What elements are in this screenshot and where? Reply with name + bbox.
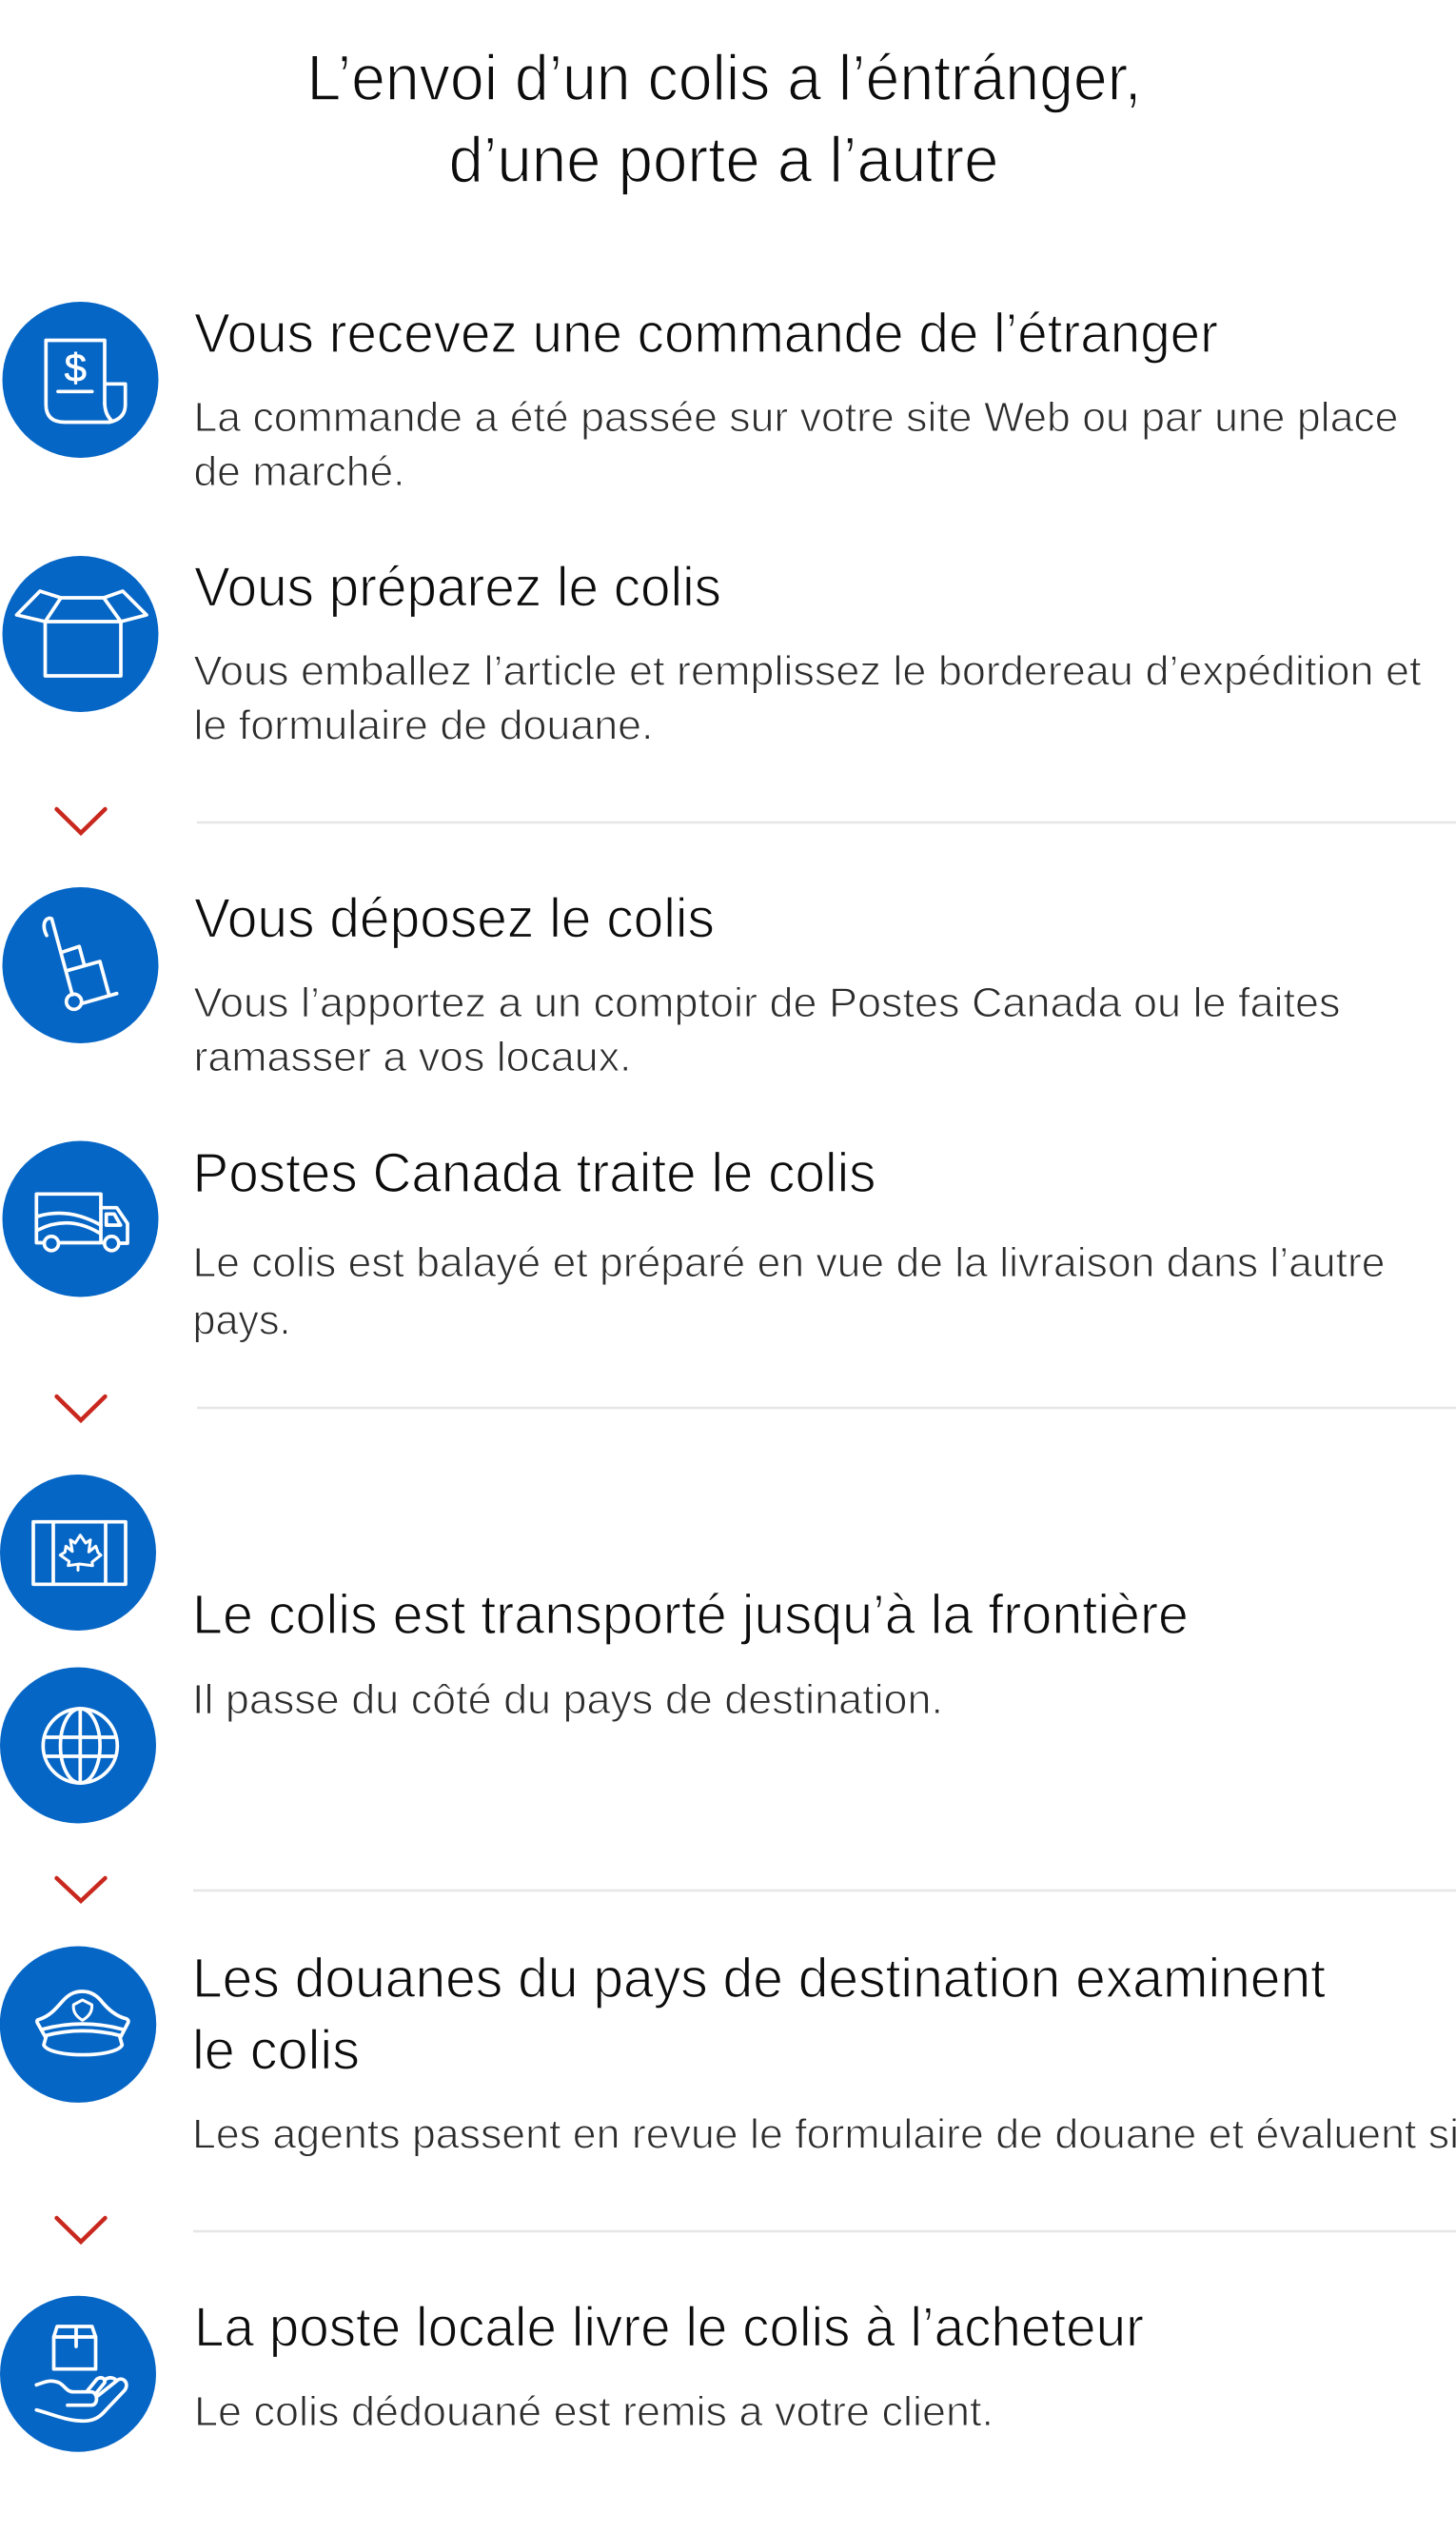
heading: préparation: Vous préparez le colis [194,556,721,619]
heading: commande: Vous recevez une commande de l’étranger [194,303,1218,365]
text: traitement: pays. [192,1297,291,1344]
text: commande: La commande a été passée sur votre site Web ou par une place [194,394,1399,441]
text: dépôt [194,980,1340,1080]
heading: dépôt: Vous déposez le colis [194,887,715,950]
step: transport [0,1475,1189,1824]
step: commande reçue [2,302,1399,495]
text: traitement: Le colis est balayé et préparé en vue de la livraison dans l’autre [192,1239,1386,1286]
text: préparation: Vous emballez l’article et remplissez le bordereau d’expédition et [194,647,1422,695]
text: dépôt: ramasser a vos locaux. [194,1034,632,1080]
heading: livraison: La poste locale livre le colis à l’acheteur [194,2296,1144,2359]
title: L’envoi d’un colis a l’éntránger, [306,42,1142,114]
heading: douanes: le colis [192,2020,360,2081]
icon: invoice with dollar sign [2,302,158,458]
icon: Canadian flag [0,1475,156,1631]
step: préparation [2,556,1422,748]
step: traitement [2,1140,1386,1344]
heading: douanes: Les douanes du pays de destination examinent [192,1948,1326,2009]
step: livraison [0,2296,1144,2452]
text: commande [194,394,1399,495]
text: livraison: Le colis dédouané est remis a votre client. [194,2388,994,2435]
text: préparation [194,647,1422,748]
icon: invoice with dollar sign: $ [65,345,87,390]
icon: customs officer cap [0,1946,156,2103]
step: dépôt [2,887,1340,1080]
heading: transport: Le colis est transporté jusqu’à la frontière [192,1584,1189,1646]
text: transport: Il passe du côté du pays de destination. [192,1676,943,1723]
arrow: chevron 4 [57,2218,105,2242]
text: préparation: le formulaire de douane. [194,703,653,748]
icon: hand truck [2,887,158,1043]
icon: hand holding parcel [0,2296,156,2452]
text: traitement [192,1239,1386,1344]
step: douanes [0,1946,1456,2157]
title [306,42,1142,196]
arrow: chevron 1 [57,809,105,833]
text: dépôt: Vous l’apportez a un comptoir de Postes Canada ou le faites [194,980,1340,1026]
heading: douanes [192,1948,1326,2081]
arrow: chevron 3 [57,1878,105,1901]
text: douanes: Les agents passent en revue le formulaire de douane et évaluent si [192,2111,1456,2157]
icon: open box [2,556,158,712]
icon: globe [0,1668,156,1824]
title: d’une porte a l’autre [449,124,999,196]
icon: truck [2,1140,158,1297]
arrow: chevron 2 [57,1396,105,1420]
text: commande: de marché. [194,448,405,495]
heading: traitement: Postes Canada traite le colis [192,1142,876,1204]
